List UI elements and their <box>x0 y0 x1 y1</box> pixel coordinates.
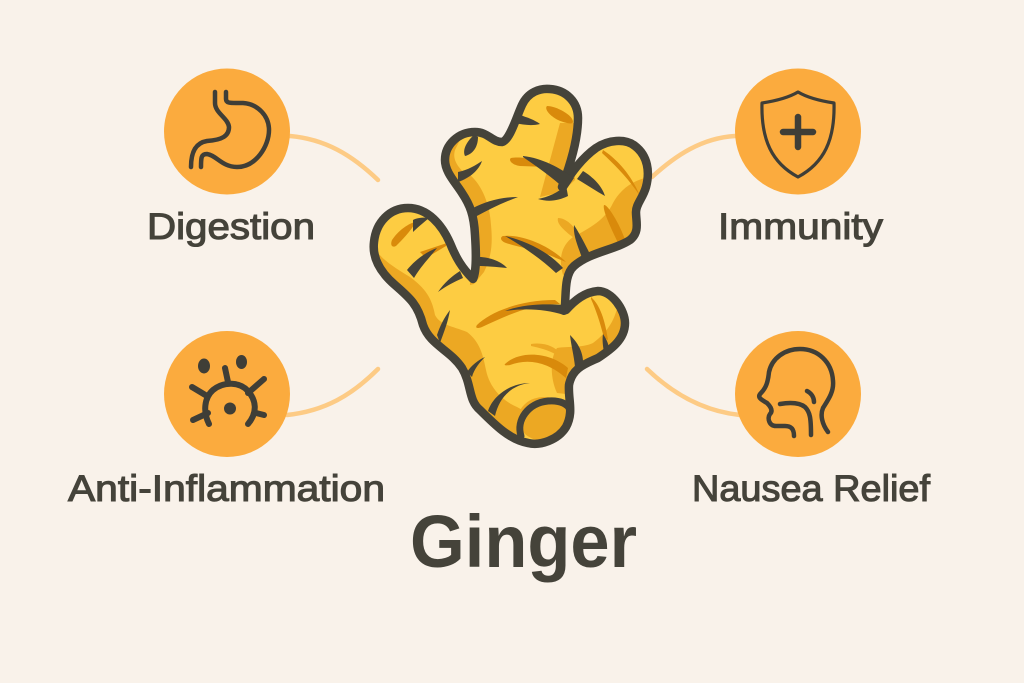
label: immunity: Immunity <box>718 206 884 247</box>
item: anti-inflammation <box>68 331 385 509</box>
label: anti-inflammation: Anti-Inflammation <box>68 468 385 509</box>
icon: stomach <box>164 68 290 194</box>
connector: nausea relief to ginger <box>647 369 740 415</box>
icon: inflamed cell <box>164 331 290 457</box>
item: immunity <box>718 68 884 247</box>
infographic canvas <box>67 68 931 582</box>
illustration: ginger root <box>370 89 655 450</box>
item: digestion <box>147 68 315 247</box>
connector: immunity to ginger <box>652 136 735 177</box>
tip of root <box>518 397 570 441</box>
label: digestion: Digestion <box>147 206 315 247</box>
title: Ginger <box>410 500 637 583</box>
label: nausea relief: Nausea Relief <box>692 468 931 509</box>
connector: digestion to ginger <box>290 136 378 180</box>
icon: head and throat <box>735 331 861 457</box>
icon: shield with plus <box>735 68 861 194</box>
item: nausea relief <box>692 331 931 509</box>
connector: anti-inflammation to ginger <box>287 369 378 415</box>
